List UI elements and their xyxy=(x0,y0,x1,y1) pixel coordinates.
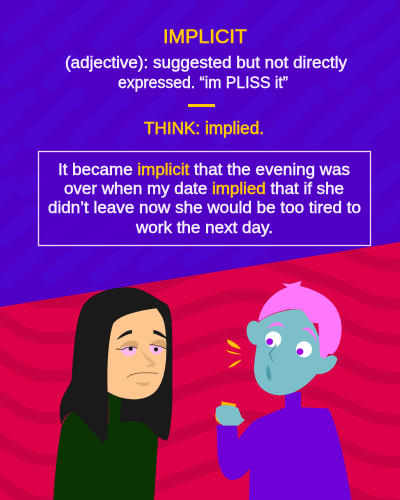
divider bar xyxy=(188,104,215,107)
black hair xyxy=(60,287,172,443)
teal head xyxy=(247,309,337,395)
title: IMPLICIT xyxy=(163,26,247,48)
think hint: THINK: implied. xyxy=(144,118,264,138)
pupil right xyxy=(297,348,303,355)
eyebrows xyxy=(267,322,317,343)
pupil left xyxy=(266,338,273,345)
red ground xyxy=(0,242,400,500)
surprise sparks xyxy=(226,339,242,368)
definition text: expressed. “im PLISS it” xyxy=(118,73,288,92)
definition text xyxy=(65,53,347,92)
lip shadow xyxy=(136,382,151,386)
example sentence box: work the next day. xyxy=(135,218,273,237)
definition text: (adjective): suggested but not directly xyxy=(65,53,347,72)
yellow phone xyxy=(215,401,236,424)
example sentence box: didn’t leave now she would be too tired to xyxy=(48,198,361,217)
example sentence box: over when my date implied that if she xyxy=(64,179,344,198)
example sentence box: It became implicit that the evening was xyxy=(58,160,350,179)
woman character xyxy=(53,287,172,500)
face xyxy=(107,308,166,399)
eye lashes xyxy=(116,345,167,349)
pink hair xyxy=(258,281,342,359)
eyebrows xyxy=(117,330,168,340)
eye bags xyxy=(120,345,163,356)
pupils xyxy=(129,347,133,351)
example sentence box xyxy=(38,152,370,246)
mouth xyxy=(127,373,158,377)
eyelids xyxy=(120,340,167,349)
nose xyxy=(269,345,276,361)
man character xyxy=(215,281,352,500)
fist xyxy=(216,405,245,426)
green sweater xyxy=(53,392,159,500)
eye left xyxy=(265,331,281,347)
eye right xyxy=(296,341,312,357)
nose xyxy=(133,351,155,367)
purple body xyxy=(217,392,352,500)
mouth xyxy=(266,365,271,381)
